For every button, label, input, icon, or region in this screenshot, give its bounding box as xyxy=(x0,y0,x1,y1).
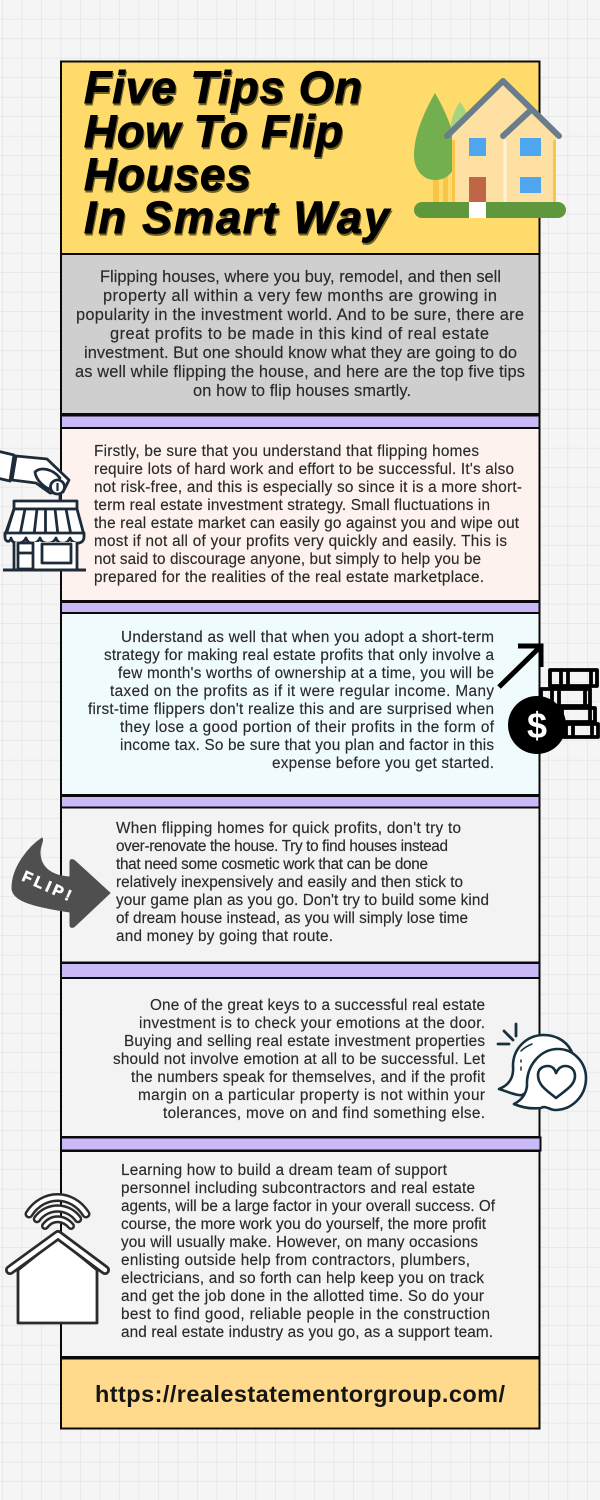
text block: tip 2: first-time flippers don't realize this and are surprised when xyxy=(88,701,494,718)
title: Houses xyxy=(84,149,251,200)
icon: house with trees xyxy=(414,81,566,218)
text block: tip 1: most if not all of your profits very quickly and easily. This is xyxy=(94,533,507,550)
text block: introduction: investment. But one should know what they are going to do xyxy=(84,344,517,362)
text block: tip 5: personnel including subcontractors and real estate xyxy=(121,1180,475,1197)
text block: tip 5: agents, will be a large factor in your overall success. Of xyxy=(121,1198,496,1215)
text block: tip 5 xyxy=(121,1162,496,1341)
text block: tip 2: Understand as well that when you adopt a short-term xyxy=(121,629,494,646)
text block: introduction: Flipping houses, where you buy, remodel, and then sell xyxy=(100,268,501,286)
text block: tip 3: that need some cosmetic work that can be done xyxy=(116,856,428,873)
title xyxy=(84,62,391,243)
divider band xyxy=(61,602,540,613)
text block: tip 1: not risk-free, and this is especially so since it is a more short- xyxy=(94,479,522,496)
text block: tip 1: Firstly, be sure that you understand that flipping homes xyxy=(94,443,479,460)
panel: tip 2 xyxy=(61,613,540,795)
text block: tip 2: few month's worths of ownership at a time, you will be xyxy=(118,665,494,682)
text block: introduction xyxy=(75,268,525,400)
text block: tip 1: prepared for the realities of the real estate marketplace. xyxy=(94,569,484,586)
text block: tip 2: strategy for making real estate profits that only involve a xyxy=(104,647,494,664)
text block: introduction: great profits to be made in this kind of real estate xyxy=(110,325,489,343)
divider band xyxy=(61,416,540,428)
icon: FLIP arrow xyxy=(12,838,110,927)
text block: tip 4: investment is to check your emotions at the door. xyxy=(139,1015,485,1032)
text block: tip 2: expense before you get started. xyxy=(272,755,494,772)
text block: tip 2: they lose a good portion of their profits in the form of xyxy=(120,719,495,736)
label: FLIP!: FLIP! xyxy=(19,868,74,905)
text block: tip 2: income tax. So be sure that you plan and factor in this xyxy=(120,737,494,754)
icon: speech bubbles with heart xyxy=(498,1024,586,1110)
text block: tip 4: margin on a particular property is not within your xyxy=(138,1087,485,1104)
text block: tip 2: taxed on the profits as if it were regular income. Many xyxy=(110,683,494,700)
text block: tip 4: One of the great keys to a successful real estate xyxy=(150,997,485,1014)
text block: tip 3: When flipping homes for quick profits, don't try to xyxy=(116,820,461,837)
text block: tip 4 xyxy=(113,997,486,1122)
text block: introduction: as well while flipping the house, and here are the top five tips xyxy=(75,363,525,381)
title: How To Flip xyxy=(84,106,343,157)
text block: tip 4: should not involve emotion at all to be successful. Let xyxy=(113,1051,486,1068)
text block: tip 5: electricians, and so forth can help keep you on track xyxy=(121,1270,484,1287)
text block: tip 1 xyxy=(94,443,522,586)
panel: tip 3 xyxy=(61,808,540,962)
text block: tip 3: and money by going that route. xyxy=(116,928,333,945)
text block: tip 4: the numbers speak for themselves, and if the profit xyxy=(131,1069,486,1086)
text block: tip 2 xyxy=(88,629,495,772)
text block: tip 1: term real estate investment strategy. Small fluctuations in xyxy=(94,497,490,514)
text block: introduction: on how to flip houses smartly. xyxy=(193,382,411,400)
text block: tip 3: over-renovate the house. Try to find houses instead xyxy=(116,838,448,855)
text block: tip 3: relatively inexpensively and easily and then stick to xyxy=(116,874,463,891)
text block: tip 4: tolerances, move on and find something else. xyxy=(163,1105,485,1122)
panel: title banner xyxy=(61,62,540,254)
panel: tip 1 xyxy=(61,428,540,601)
text block: tip 1: the real estate market can easily go against you and wipe out xyxy=(94,515,520,532)
text block: tip 1: require lots of hard work and effort to be successful. It's also xyxy=(94,461,514,478)
text block: tip 5: Learning how to build a dream team of support xyxy=(121,1162,448,1179)
text block: tip 5: enlisting outside help from contractors, plumbers, xyxy=(121,1252,470,1269)
text block: tip 3 xyxy=(116,820,489,945)
divider band xyxy=(61,1138,540,1150)
website url: https://realestatementorgroup.com/ xyxy=(95,1381,505,1407)
icon: dollar sign: $ xyxy=(527,705,547,746)
text block: introduction: property all within a very few months are growing in xyxy=(103,287,497,305)
text block: tip 5: best to find good, reliable people in the construction xyxy=(121,1306,490,1323)
title: In Smart Way xyxy=(84,192,391,243)
icon: arrow and coin stacks with dollar xyxy=(499,646,598,754)
text block: tip 5: course, the more work you do yourself, the more profit xyxy=(121,1216,487,1233)
title: Five Tips On xyxy=(84,62,362,113)
text block: tip 5: you will usually make. However, on many occasions xyxy=(121,1234,478,1251)
panel: website link xyxy=(61,1358,540,1428)
panel: introduction xyxy=(61,254,540,414)
panel: tip 5 xyxy=(61,1151,540,1357)
text block: tip 5: and get the job done in the allotted time. So do your xyxy=(121,1288,484,1305)
icon: smart home with wifi xyxy=(10,1198,105,1323)
panel: tip 4 xyxy=(61,978,540,1137)
text block: tip 5: and real estate industry as you go, as a support team. xyxy=(121,1324,493,1341)
icon: hand dropping coin into store xyxy=(0,451,86,570)
text block: tip 1: not said to discourage anyone, but simply to help you be xyxy=(94,551,481,568)
divider band xyxy=(61,963,540,978)
text block: introduction: popularity in the investment world. And to be sure, there are xyxy=(76,306,524,324)
text block: tip 3: your game plan as you go. Don't try to build some kind xyxy=(116,892,489,909)
divider band xyxy=(61,796,540,808)
text block: tip 4: Buying and selling real estate investment properties xyxy=(124,1033,485,1050)
text block: tip 3: of dream house instead, as you will simply lose time xyxy=(116,910,468,927)
